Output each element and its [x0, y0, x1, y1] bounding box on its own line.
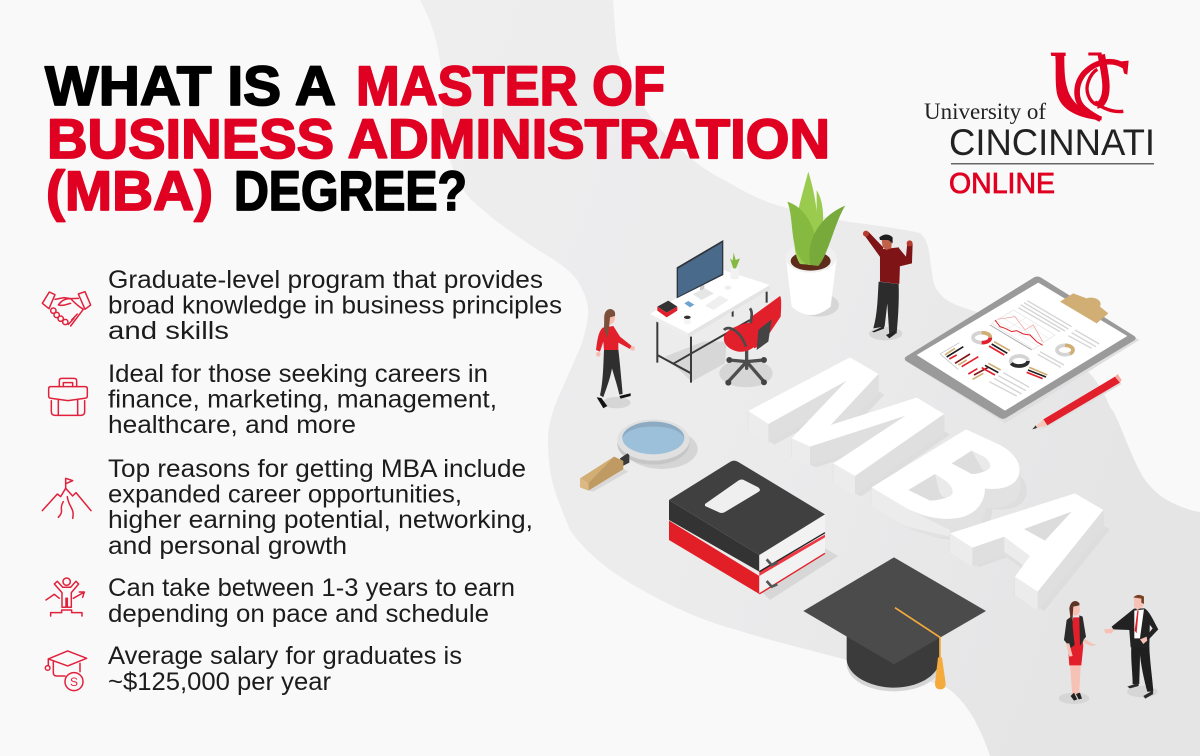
text: ~$125,000 per year: [108, 668, 331, 696]
text: finance, marketing, management,: [108, 386, 497, 414]
illustration: woman walking: [596, 309, 635, 408]
University of Cincinnati Online logo: CINCINNATI: [949, 122, 1155, 163]
text: [108, 266, 562, 345]
illustration: businessman: [1104, 595, 1158, 699]
text: [108, 642, 462, 696]
icon: handshake: [42, 292, 91, 326]
text: [108, 455, 533, 560]
University of Cincinnati Online logo: ONLINE: [949, 168, 1055, 200]
icon: graduation cap with dollar coin: S: [70, 675, 78, 689]
text: and skills: [108, 317, 229, 345]
title: BUSINESS ADMINISTRATION: [47, 107, 830, 170]
text: expanded career opportunities,: [108, 480, 462, 508]
line chart: [990, 310, 1055, 350]
list item: duration: [46, 574, 515, 628]
icon: person on podium: [46, 578, 84, 616]
University of Cincinnati Online logo: University of: [924, 99, 1046, 124]
big isometric MBA letters: [748, 357, 1110, 611]
title: DEGREE?: [234, 159, 467, 222]
illustration: red pencil: [1032, 374, 1122, 430]
text: depending on pace and schedule: [108, 600, 489, 628]
illustration: businesswoman: [1059, 601, 1097, 704]
text: Average salary for graduates is: [108, 642, 462, 670]
UC monogram: [1051, 53, 1129, 120]
list item: salary: [45, 642, 462, 696]
illustration: man cheering: [863, 231, 913, 340]
title: MASTER OF: [356, 54, 665, 117]
donut charts: [973, 333, 1073, 366]
title: WHAT IS A: [45, 54, 336, 117]
letter M: [748, 357, 950, 497]
list item: graduate-level program: [42, 266, 562, 345]
illustration: graduation cap: [803, 557, 986, 691]
letter B: [872, 429, 1027, 540]
text: [108, 360, 497, 439]
text: higher earning potential, networking,: [108, 506, 533, 534]
illustration: clipboard with charts: [905, 276, 1139, 423]
text: Graduate-level program that provides: [108, 266, 543, 294]
University of Cincinnati Online logo: [924, 53, 1155, 200]
icon: graduation cap with dollar coin: [45, 651, 87, 691]
background gray blob: [420, 0, 1200, 756]
text: Can take between 1-3 years to earn: [108, 574, 515, 602]
icon: mountain with flag: [42, 478, 91, 518]
illustration: office desk with monitor and chair: [650, 240, 781, 387]
title: [45, 54, 830, 222]
list item: ideal careers: [49, 360, 497, 439]
document gray text lines: [989, 301, 1099, 396]
text: broad knowledge in business principles: [108, 292, 562, 320]
letter A: [950, 493, 1110, 611]
illustration: magnifying glass: [580, 419, 698, 492]
bar charts: [940, 342, 1047, 379]
illustration: stacked books: [669, 461, 838, 600]
text: healthcare, and more: [108, 411, 356, 439]
title: (MBA): [46, 159, 213, 222]
illustration: large potted plant: [786, 172, 845, 317]
text: Top reasons for getting MBA include: [108, 455, 526, 483]
text: and personal growth: [108, 532, 347, 560]
icon: briefcase: [49, 378, 87, 415]
text: Ideal for those seeking careers in: [108, 360, 488, 388]
list item: top reasons: [42, 455, 533, 560]
text: [108, 574, 515, 628]
